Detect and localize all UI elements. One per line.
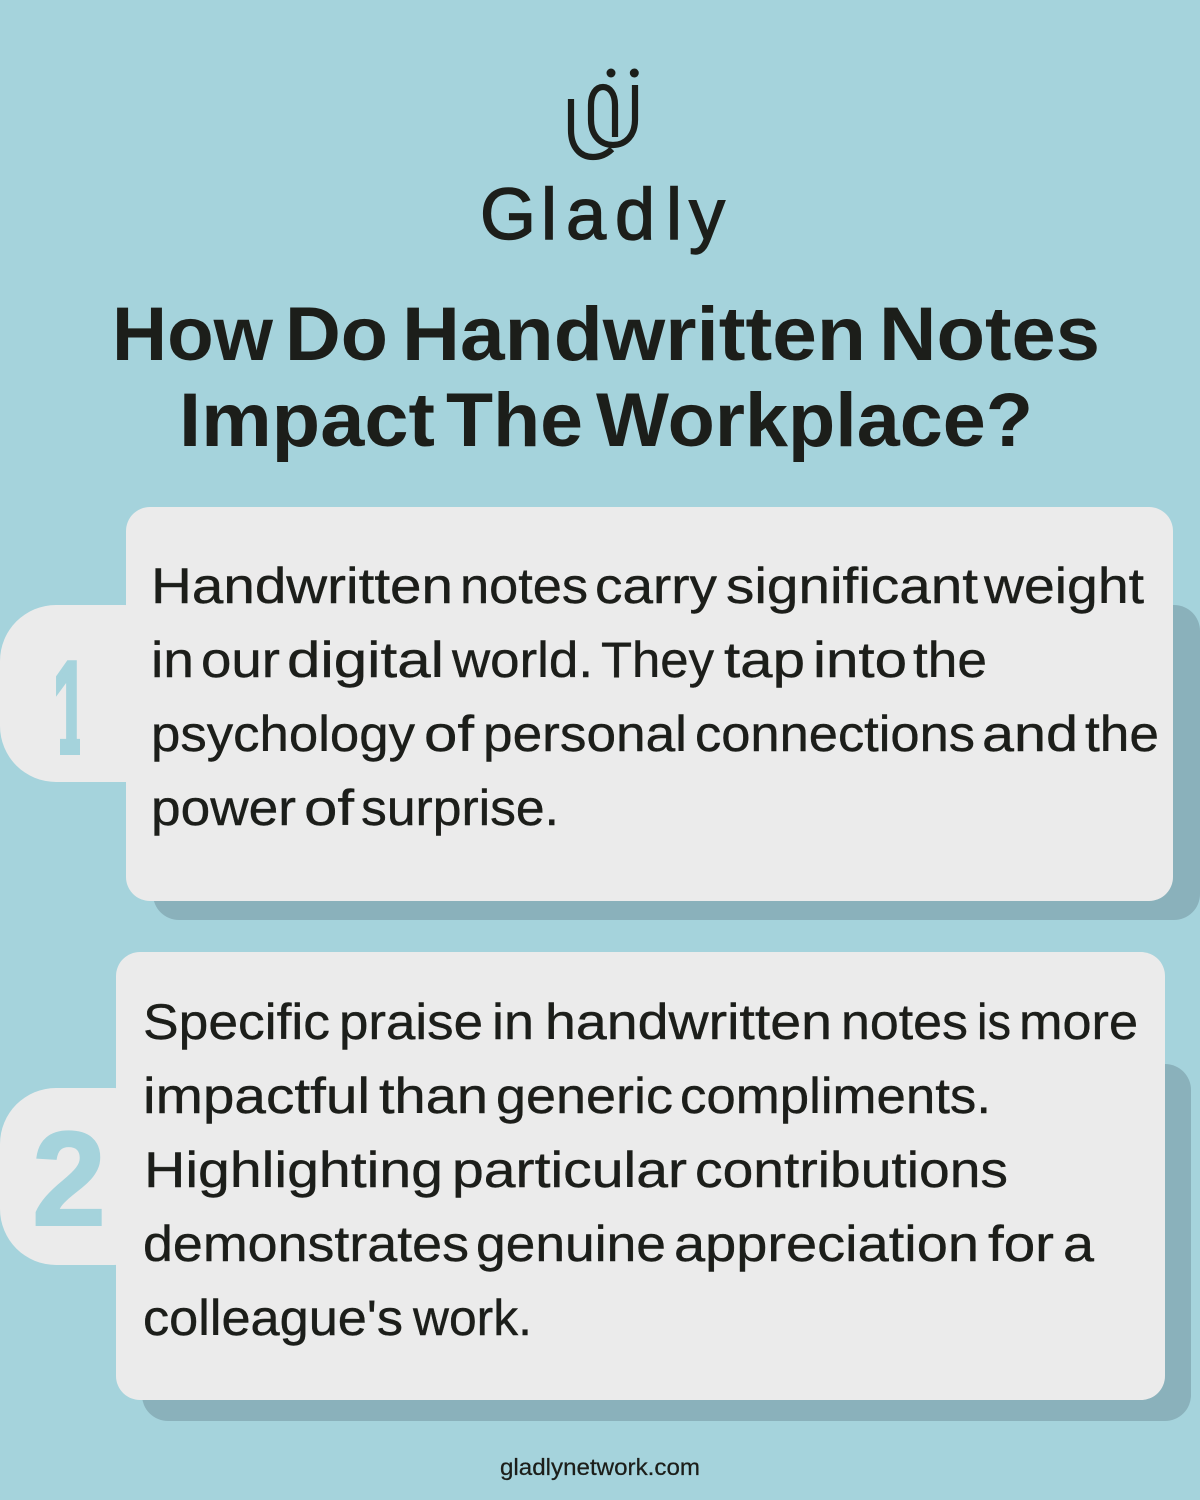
icon: paperclip smile [571,68,639,157]
text: point 2: colleague's [143,1290,403,1346]
text: point 1: the [913,632,987,688]
text: point 1: and [982,706,1078,762]
text: point 1: into [813,632,907,688]
text: point 1: psychology [151,706,415,762]
text: point 2: handwritten [545,994,832,1050]
text: point 1: of [424,706,474,762]
text: point 2: demonstrates [143,1216,469,1272]
text: point 2: Specific [143,994,330,1050]
text: point 2: praise [339,994,483,1050]
text: point 1: power [151,780,296,836]
panel shadow [142,1064,1191,1421]
text: point 1: world. [451,632,593,688]
text: point 2: impactful [143,1068,370,1124]
title: How [112,292,274,377]
text: point 2: compliments. [680,1068,991,1124]
logo wordmark: Gladly [480,175,725,255]
text: point 2: Highlighting [144,1142,443,1198]
title: The [446,378,583,463]
text: point 2: for [988,1216,1054,1272]
text: point 2: in [492,994,534,1050]
text: point 2: genuine [476,1216,666,1272]
text: point 1: significant [726,558,978,614]
panel: point 1 [0,507,1200,920]
number tab [0,1088,170,1265]
text: point 1: connections [695,706,975,762]
panel: point 2 [0,952,1191,1421]
title: Impact [179,378,435,463]
text: point 2: a [1063,1216,1094,1272]
text: point 1: surprise. [361,780,559,836]
text: point 1: of [304,780,354,836]
text: point 1: They [601,632,714,688]
text: point 2: is [977,994,1011,1050]
text: point 2: appreciation [674,1216,979,1272]
text: point 2: than [379,1068,488,1124]
title: Handwritten [402,292,866,377]
number 2: 2 [32,1105,106,1254]
title: Notes [879,292,1100,377]
title: Workplace? [596,378,1033,463]
card [116,952,1165,1400]
text: point 2: work. [412,1290,532,1346]
text: point 1: digital [287,632,444,688]
text: point 1: carry [595,558,717,614]
panel shadow [153,605,1200,920]
text: point 1: personal [483,706,687,762]
text: point 1: in [151,632,194,688]
text: point 1: our [201,632,280,688]
text: point 2: generic [496,1068,673,1124]
title: Do [285,292,388,377]
text: point 2: more [1019,994,1138,1050]
card [126,507,1173,901]
number tab [0,605,180,782]
logo: Gladly [480,68,725,255]
title [112,292,1100,463]
text: point 2 [143,994,1138,1346]
text: point 1: tap [724,632,805,688]
footer url: gladlynetwork.com [500,1454,700,1480]
text: point 1: weight [983,558,1144,614]
text: point 1: Handwritten [151,558,453,614]
text: point 1 [151,558,1159,836]
text: point 2: particular [452,1142,687,1198]
text: point 2: notes [841,994,968,1050]
text: point 1: notes [460,558,588,614]
panel: point 1: 1 [53,635,87,784]
text: point 1: the [1085,706,1159,762]
text: point 2: contributions [695,1142,1008,1198]
